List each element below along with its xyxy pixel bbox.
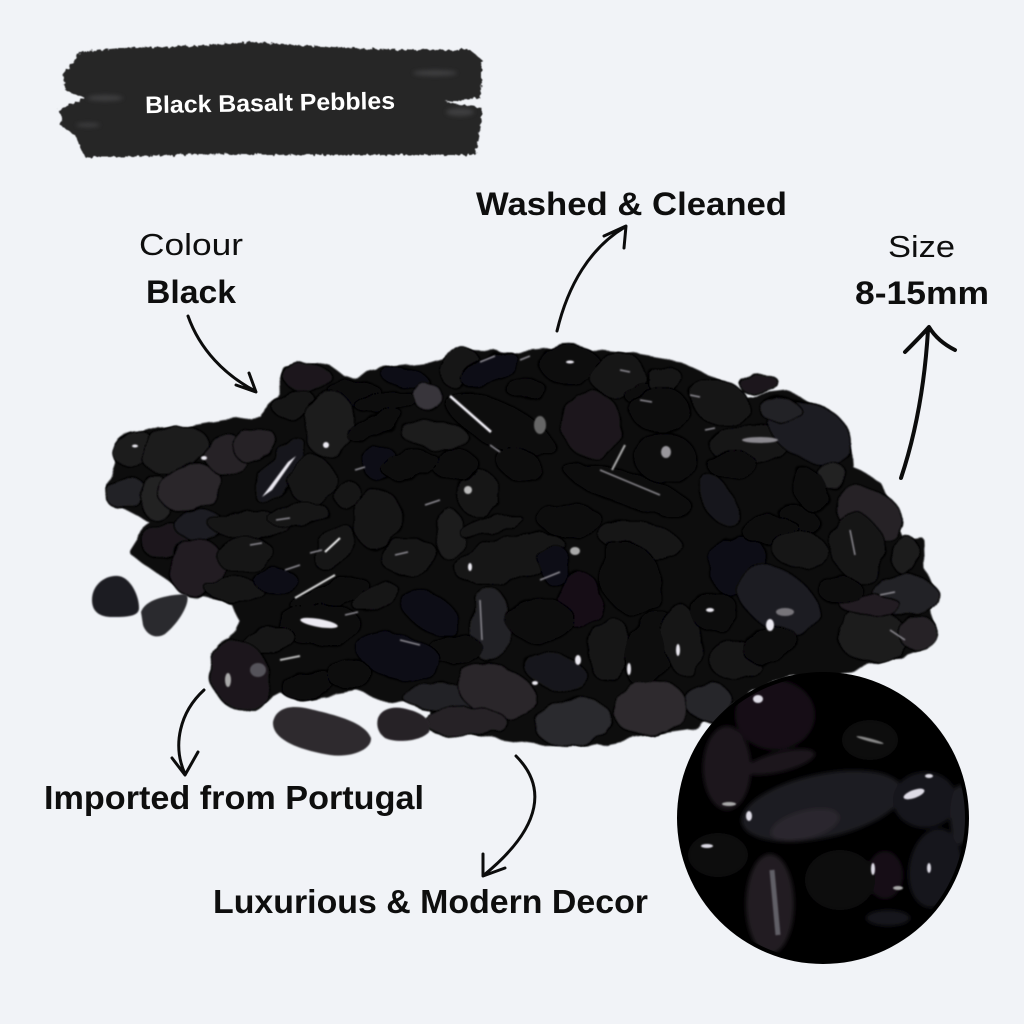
arrow: colour	[188, 316, 256, 392]
label: size	[855, 229, 989, 311]
banner: brush stroke title	[58, 42, 482, 157]
label: size: Size	[888, 229, 955, 264]
arrow: imported	[172, 690, 204, 775]
left-centre stones	[300, 388, 360, 462]
label: colour black: Colour	[139, 227, 243, 262]
front grey stones	[403, 683, 487, 711]
pebble pile photo	[92, 341, 938, 756]
close-up highlights	[701, 695, 933, 935]
loose stones around the pile	[92, 576, 430, 756]
pebble highlights	[132, 356, 905, 687]
pebbles	[101, 341, 938, 751]
label: size: 8-15mm	[855, 275, 989, 311]
arrow: washed	[557, 226, 626, 331]
label: colour black: Black	[146, 274, 236, 310]
rear left lighter stones	[109, 427, 161, 473]
arrow: size	[901, 327, 955, 478]
label: colour black	[139, 227, 243, 310]
arrow: luxurious	[483, 756, 535, 876]
label: washed and cleaned: Washed & Cleaned	[476, 186, 787, 222]
label: imported from Portugal: Imported from Portugal	[44, 779, 424, 816]
pile silhouette	[112, 351, 933, 741]
close-up stones	[735, 680, 815, 750]
right stones	[758, 388, 862, 476]
detail circle: close-up of pebbles	[677, 672, 970, 964]
banner text: Black Basalt Pebbles	[145, 88, 395, 119]
label: luxurious and modern decor: Luxurious & Modern Decor	[213, 883, 648, 920]
centre stones	[436, 379, 564, 471]
